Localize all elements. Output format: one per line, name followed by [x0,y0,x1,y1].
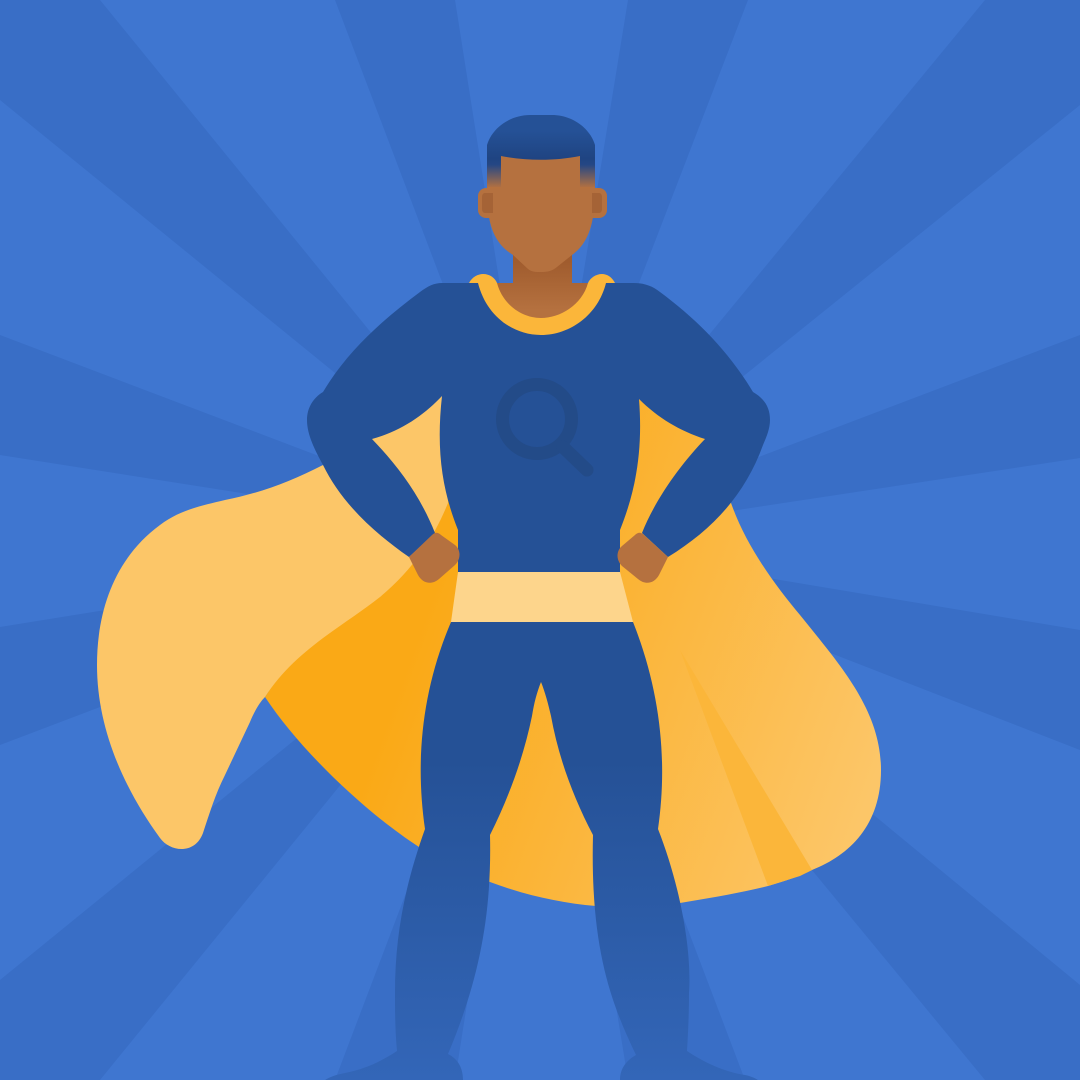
cape [97,380,881,906]
cape: fold streak [680,650,812,886]
hero figure [307,115,770,1080]
legs [325,622,758,1080]
emblem: magnifying glass [502,384,587,470]
chest skin [490,283,595,322]
belt [451,572,633,622]
inner ears [482,193,602,213]
cape: main back layer [265,390,881,906]
right hand [618,533,668,583]
left hand [409,533,460,583]
cape: light left flap [97,380,460,849]
collar [469,274,615,335]
torso and arms [307,283,770,572]
neck [513,240,572,290]
ears [478,188,607,218]
face [488,156,595,272]
hair [487,115,595,190]
